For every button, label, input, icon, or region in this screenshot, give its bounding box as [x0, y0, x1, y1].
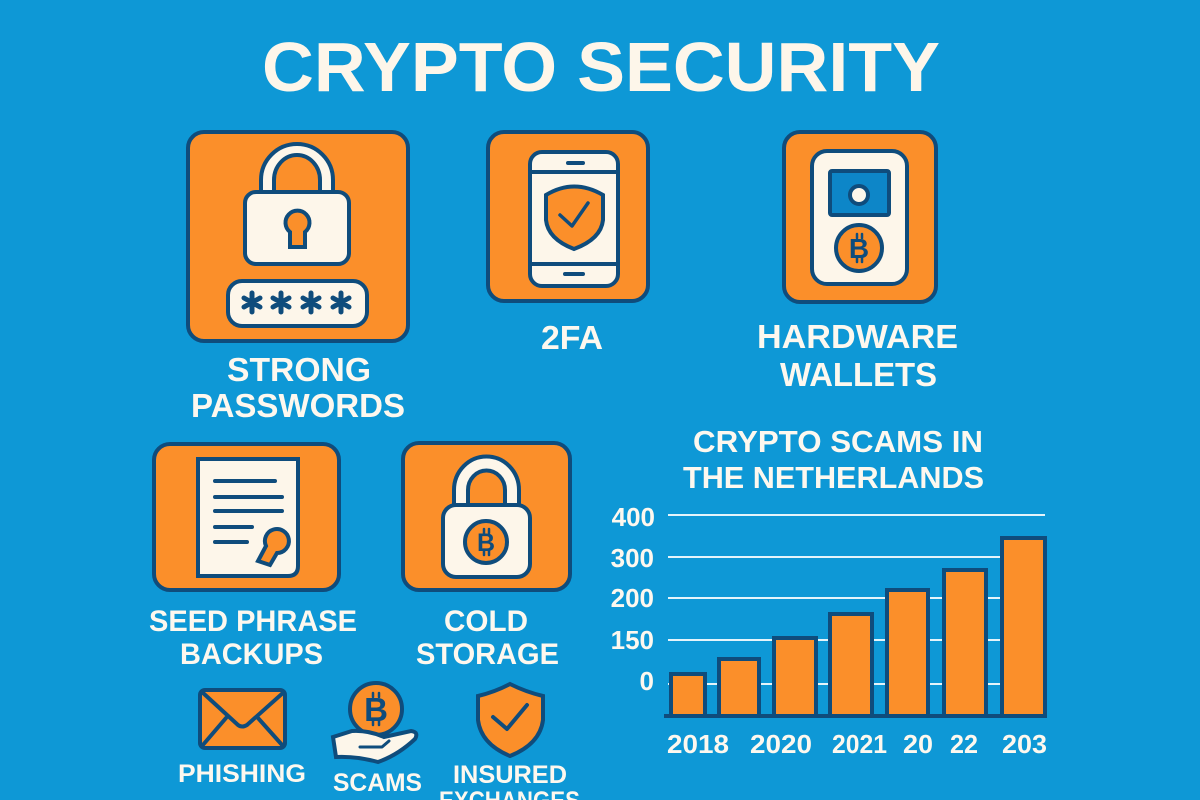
x-axis labels: 22 [950, 729, 978, 759]
item: scams [333, 683, 422, 797]
y-axis labels: 300 [611, 543, 654, 573]
y-axis labels: 400 [612, 502, 655, 532]
panel: strong passwords [188, 132, 408, 424]
chart title: THE NETHERLANDS [683, 460, 984, 495]
x-axis labels: 203 [1002, 729, 1047, 759]
y-axis labels: 150 [611, 625, 654, 655]
panel: cold storage [403, 443, 570, 671]
panel: 2FA [488, 132, 648, 356]
y-axis labels: 0 [640, 666, 654, 696]
label: phishing: PHISHING [178, 760, 306, 788]
icon: envelope [200, 690, 285, 748]
label: cold storage: STORAGE [416, 638, 559, 671]
icon: padlock with bitcoin [403, 443, 570, 590]
icon: phone with shield [488, 132, 648, 301]
item: phishing [178, 690, 306, 788]
icon: document with key [154, 444, 339, 590]
icon: hardware wallet device: B [849, 233, 869, 264]
label: insured exchanges: INSURED [453, 761, 567, 789]
label: hardware wallets: WALLETS [780, 356, 937, 393]
icon: hardware wallet device [784, 132, 936, 302]
icon: padlock with bitcoin: B [477, 529, 495, 557]
label: seed phrase backups: SEED PHRASE [149, 605, 357, 638]
item: insured exchanges [439, 684, 580, 800]
label: cold storage: COLD [444, 605, 528, 638]
label: 2FA: 2FA [541, 319, 603, 356]
label: strong passwords: PASSWORDS [191, 387, 405, 424]
panel: seed phrase backups [149, 444, 357, 671]
panel: crypto scams chart [611, 424, 1047, 759]
chart title: CRYPTO SCAMS IN [693, 424, 983, 459]
y-axis labels [611, 502, 655, 696]
title: CRYPTO SECURITY [262, 28, 940, 106]
icon: shield with check [478, 684, 543, 756]
x-axis labels: 2020 [750, 729, 812, 759]
y-axis labels: 200 [611, 583, 654, 613]
label: strong passwords: STRONG [227, 351, 371, 388]
icon: padlock and password field [188, 132, 408, 341]
icon: hand holding bitcoin: B [364, 691, 388, 728]
x-axis labels [667, 729, 1047, 759]
label: hardware wallets: HARDWARE [757, 318, 958, 355]
x-axis labels: 2018 [667, 729, 729, 759]
label: scams: SCAMS [333, 769, 422, 797]
bar chart [664, 538, 1047, 718]
label: seed phrase backups: BACKUPS [180, 638, 323, 671]
x-axis labels: 20 [903, 729, 933, 759]
panel: hardware wallets [757, 132, 958, 393]
x-axis labels: 2021 [832, 729, 887, 759]
